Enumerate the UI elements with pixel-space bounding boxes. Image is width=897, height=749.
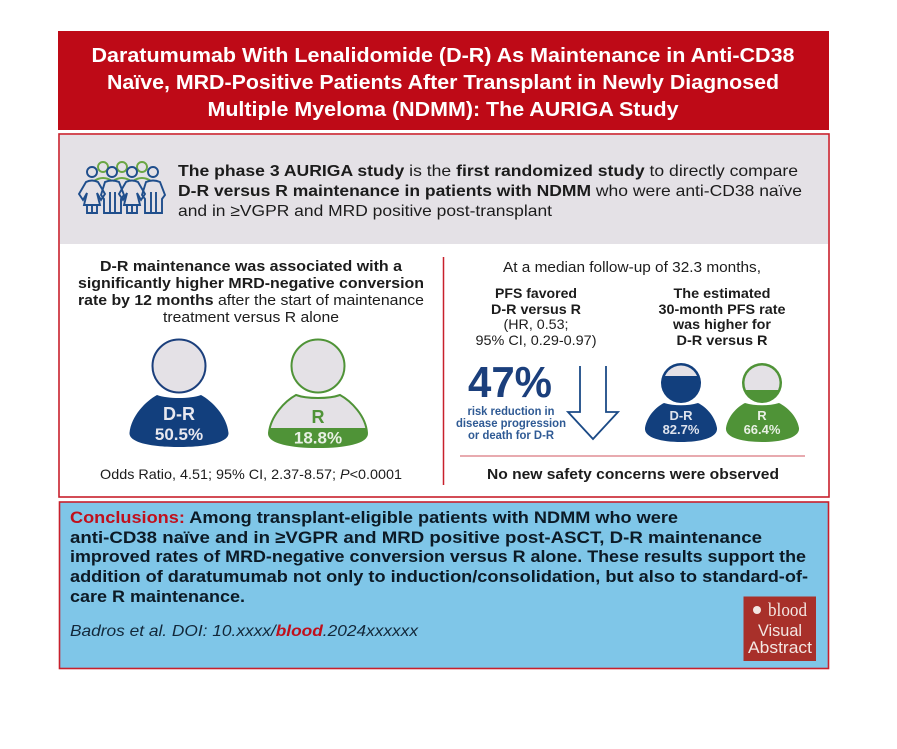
icon: D-R patient 82.7% — [645, 363, 717, 442]
30-month PFS text: D-R versus R — [676, 332, 768, 348]
PFS hazard ratio text — [476, 285, 596, 348]
blood visual abstract logo: Abstract — [748, 638, 812, 657]
study description text — [178, 163, 802, 220]
47% risk reduction — [456, 358, 566, 442]
MRD heading — [78, 259, 424, 326]
47% risk reduction: or death for D-R — [468, 430, 555, 442]
title banner: Daratumumab With Lenalidomide (D-R) As Maintenance in Anti-CD38 — [92, 44, 794, 67]
odds ratio: Odds Ratio, 4.51; 95% CI, 2.37-8.57; P<0.0001 — [100, 466, 402, 482]
PFS hazard ratio text: (HR, 0.53; — [504, 316, 568, 332]
30-month PFS text: 30-month PFS rate — [658, 301, 786, 317]
title banner — [58, 31, 829, 130]
follow-up heading: At a median follow-up of 32.3 months, — [503, 259, 761, 276]
title banner: Multiple Myeloma (NDMM): The AURIGA Study — [208, 98, 679, 121]
47% risk reduction: 47% — [468, 358, 552, 407]
MRD heading: D-R maintenance was associated with a — [100, 259, 403, 275]
panel: MRD-negative conversion — [78, 259, 424, 482]
icon: D-R patient 50.5% — [129, 340, 229, 447]
icon: D-R patient 82.7%: 82.7% — [663, 422, 700, 437]
blood visual abstract logo — [744, 596, 816, 661]
30-month PFS text: was higher for — [672, 316, 772, 332]
icon: R patient 18.8%: R — [312, 407, 324, 427]
icon: R patient 18.8%: 18.8% — [294, 428, 342, 448]
study description text: and in ≥VGPR and MRD positive post-transplant — [178, 203, 553, 220]
vertical divider — [442, 257, 444, 485]
title banner: Naïve, MRD-Positive Patients After Transplant in Newly Diagnosed — [107, 71, 779, 94]
blood visual abstract logo: blood — [768, 600, 807, 621]
MRD heading: significantly higher MRD-negative conversion — [78, 276, 424, 292]
30-month PFS text — [658, 285, 786, 348]
conclusions text: addition of daratumumab not only to induction/consolidation, but also to standard-of- — [70, 567, 808, 586]
study description text: The phase 3 AURIGA study is the first randomized study to directly compare — [178, 163, 798, 180]
conclusions text: care R maintenance. — [70, 587, 245, 606]
30-month PFS text: The estimated — [674, 285, 770, 301]
safety statement: No new safety concerns were observed — [487, 466, 779, 483]
PFS hazard ratio text: PFS favored — [495, 285, 577, 301]
icon: patient group — [79, 162, 165, 213]
icon: R patient 66.4%: R — [757, 408, 767, 423]
icon: D-R patient 50.5%: 50.5% — [155, 425, 203, 444]
conclusions text: improved rates of MRD-negative conversion versus R alone. These results support the — [70, 547, 806, 566]
icon: R patient 66.4%: 66.4% — [744, 422, 781, 437]
conclusions text: anti-CD38 naïve and in ≥VGPR and MRD positive post-ASCT, D-R maintenance — [70, 528, 762, 547]
blood visual abstract logo: Visual — [758, 621, 802, 640]
arrow: down — [568, 366, 618, 439]
icon: D-R patient 82.7%: D-R — [669, 408, 693, 423]
icon: D-R patient 50.5%: D-R — [163, 404, 195, 424]
MRD heading: rate by 12 months after the start of maintenance — [78, 293, 424, 309]
conclusions text — [70, 508, 808, 606]
panel: study description — [60, 135, 828, 244]
icon: R patient 18.8% — [269, 340, 367, 448]
panel: conclusions — [60, 502, 828, 668]
PFS hazard ratio text: D-R versus R — [491, 301, 581, 317]
panel: study results frame — [59, 134, 829, 497]
icon: R patient 66.4% — [726, 363, 799, 442]
panel: PFS results — [456, 259, 805, 483]
MRD heading: treatment versus R alone — [163, 310, 339, 326]
47% risk reduction: risk reduction in — [468, 406, 554, 418]
study description text: D-R versus R maintenance in patients with NDMM who were anti-CD38 naïve — [178, 183, 802, 200]
47% risk reduction: disease progression — [456, 418, 566, 430]
conclusions text: Conclusions: Among transplant-eligible patients with NDMM who were — [70, 508, 678, 527]
citation: Badros et al. DOI: 10.xxxx/ blood.2024xxxxxx — [70, 623, 419, 640]
PFS hazard ratio text: 95% CI, 0.29-0.97) — [476, 332, 596, 348]
